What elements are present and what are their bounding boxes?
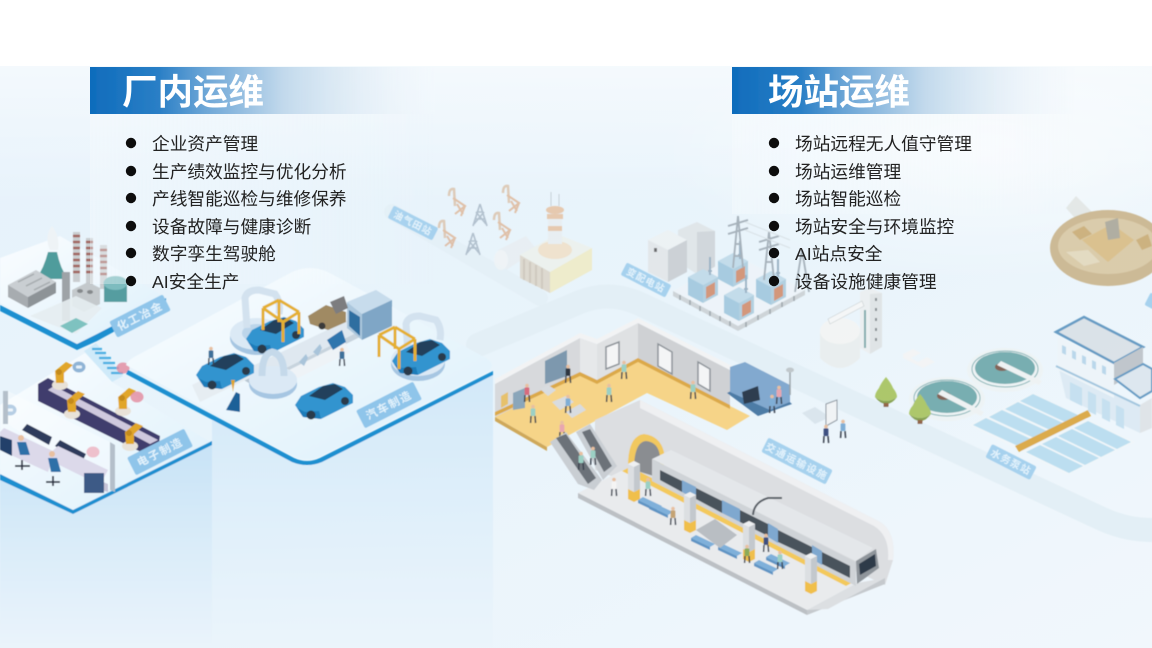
tag: chemical metallurgy <box>109 294 171 338</box>
robot cell: left <box>230 290 304 355</box>
bullet list: 生产绩效监控与优化分析 <box>152 162 347 182</box>
worker: left <box>209 347 214 365</box>
seats on conveyor <box>299 330 346 366</box>
hall floor <box>495 358 750 451</box>
passengers in hall <box>525 361 782 439</box>
silo <box>820 318 860 368</box>
panel backdrop <box>732 114 1075 214</box>
assembly line <box>38 378 160 454</box>
filter pools <box>970 393 1135 475</box>
robot cell: centre <box>249 352 297 399</box>
platform passengers <box>579 447 783 569</box>
ticket machines <box>501 350 586 418</box>
glass partitions <box>3 391 115 492</box>
escalators <box>550 424 617 490</box>
main building <box>1056 317 1152 433</box>
clarifier tank: left <box>909 377 985 421</box>
illustrated isometric scene <box>0 186 1152 648</box>
blocks <box>903 349 935 368</box>
worker: right <box>340 348 345 366</box>
horizontal tank <box>494 236 537 270</box>
car: lower <box>295 383 353 420</box>
substation <box>648 216 809 331</box>
road network <box>392 212 1152 530</box>
train <box>652 450 879 586</box>
station tags <box>109 205 1152 484</box>
transit: platform and train <box>550 400 893 615</box>
transformers <box>688 241 786 321</box>
bullet list: 产线智能巡检与维修保养 <box>152 189 347 209</box>
electrical cabinets <box>648 222 715 282</box>
open-pit mine <box>1050 196 1152 286</box>
bullet list: AI安全生产 <box>152 272 239 292</box>
tag: substation: 变配电站 <box>624 266 667 295</box>
heading bar: 场站运维 <box>768 72 910 112</box>
water treatment station <box>820 288 1152 475</box>
tag: automotive <box>356 382 422 428</box>
yellow robot arms <box>52 362 143 451</box>
bullet list: 场站远程无人值守管理 <box>795 134 972 154</box>
panel: site operations <box>732 67 1075 292</box>
heading bar <box>90 67 435 114</box>
grey plant building <box>8 270 100 321</box>
tag: electronics: 电子制造 <box>135 434 185 470</box>
bullet list <box>769 134 972 292</box>
wall posters <box>606 342 710 391</box>
tag: water: 水务泵站 <box>988 446 1034 478</box>
bullet list: 企业资产管理 <box>152 134 258 154</box>
cooling tower and smoke <box>36 226 68 279</box>
hall walls <box>495 318 732 418</box>
bullet list: 场站智能巡检 <box>795 189 901 209</box>
treatment pads <box>30 296 102 334</box>
bullet list: 数字孪生驾驶舱 <box>152 244 276 264</box>
pumpjacks and derricks <box>439 186 519 255</box>
stairs between platforms <box>84 343 123 382</box>
tag: oil and gas <box>388 205 438 241</box>
tag: oil and gas: 油气田站 <box>391 209 434 238</box>
control tower <box>546 192 564 244</box>
heading bar: 厂内运维 <box>122 72 264 112</box>
striped stacks <box>73 232 107 289</box>
tag: transport: 交通运输设施 <box>763 440 830 483</box>
platform pillars <box>628 461 817 594</box>
info kiosk with people <box>802 400 846 443</box>
bullet list: 设备故障与健康诊断 <box>152 217 311 237</box>
panel backdrop <box>90 114 435 284</box>
platform floor <box>578 467 885 615</box>
panel: electronics manufacturing platform <box>0 353 212 514</box>
heading bar <box>732 67 1075 114</box>
tag: automotive: 汽车制造 <box>364 387 414 423</box>
fenced yard <box>673 255 805 331</box>
panel: in-plant operations <box>90 67 435 292</box>
conveyor line <box>192 318 370 402</box>
bullet list: 场站运维管理 <box>795 162 901 182</box>
service booth <box>727 362 794 416</box>
inspection gate <box>347 290 392 340</box>
tunnel shell <box>595 400 893 585</box>
stairway on platform <box>696 519 737 548</box>
transit: station hall <box>495 318 846 451</box>
hanging door <box>226 380 240 412</box>
conveyor tower <box>828 288 882 354</box>
water tank <box>104 276 128 302</box>
pylons <box>728 216 809 292</box>
tag: mine, cropped at right edge <box>1144 292 1152 318</box>
support columns under platforms <box>0 372 493 648</box>
bullet list: AI站点安全 <box>795 244 883 264</box>
benches <box>638 497 790 575</box>
panel: automotive manufacturing platform <box>126 268 493 465</box>
panel: chemical metallurgy platform <box>0 226 166 350</box>
clarifier tank: right <box>967 348 1043 392</box>
robot cell: right <box>379 316 450 381</box>
tag: electronics <box>127 429 193 475</box>
status bubbles <box>4 362 144 458</box>
brown vehicle <box>308 296 348 330</box>
oil and gas field <box>439 186 592 293</box>
tag: chemical metallurgy: 化工冶金 <box>115 298 165 334</box>
tag: substation <box>621 262 671 298</box>
bullet list: 场站安全与环境监控 <box>795 217 955 237</box>
control desks with operators <box>0 424 108 493</box>
bullet list <box>126 134 347 292</box>
process building <box>520 234 592 293</box>
car: left <box>196 353 254 390</box>
trees <box>875 377 931 424</box>
bullet list: 设备设施健康管理 <box>795 272 937 292</box>
